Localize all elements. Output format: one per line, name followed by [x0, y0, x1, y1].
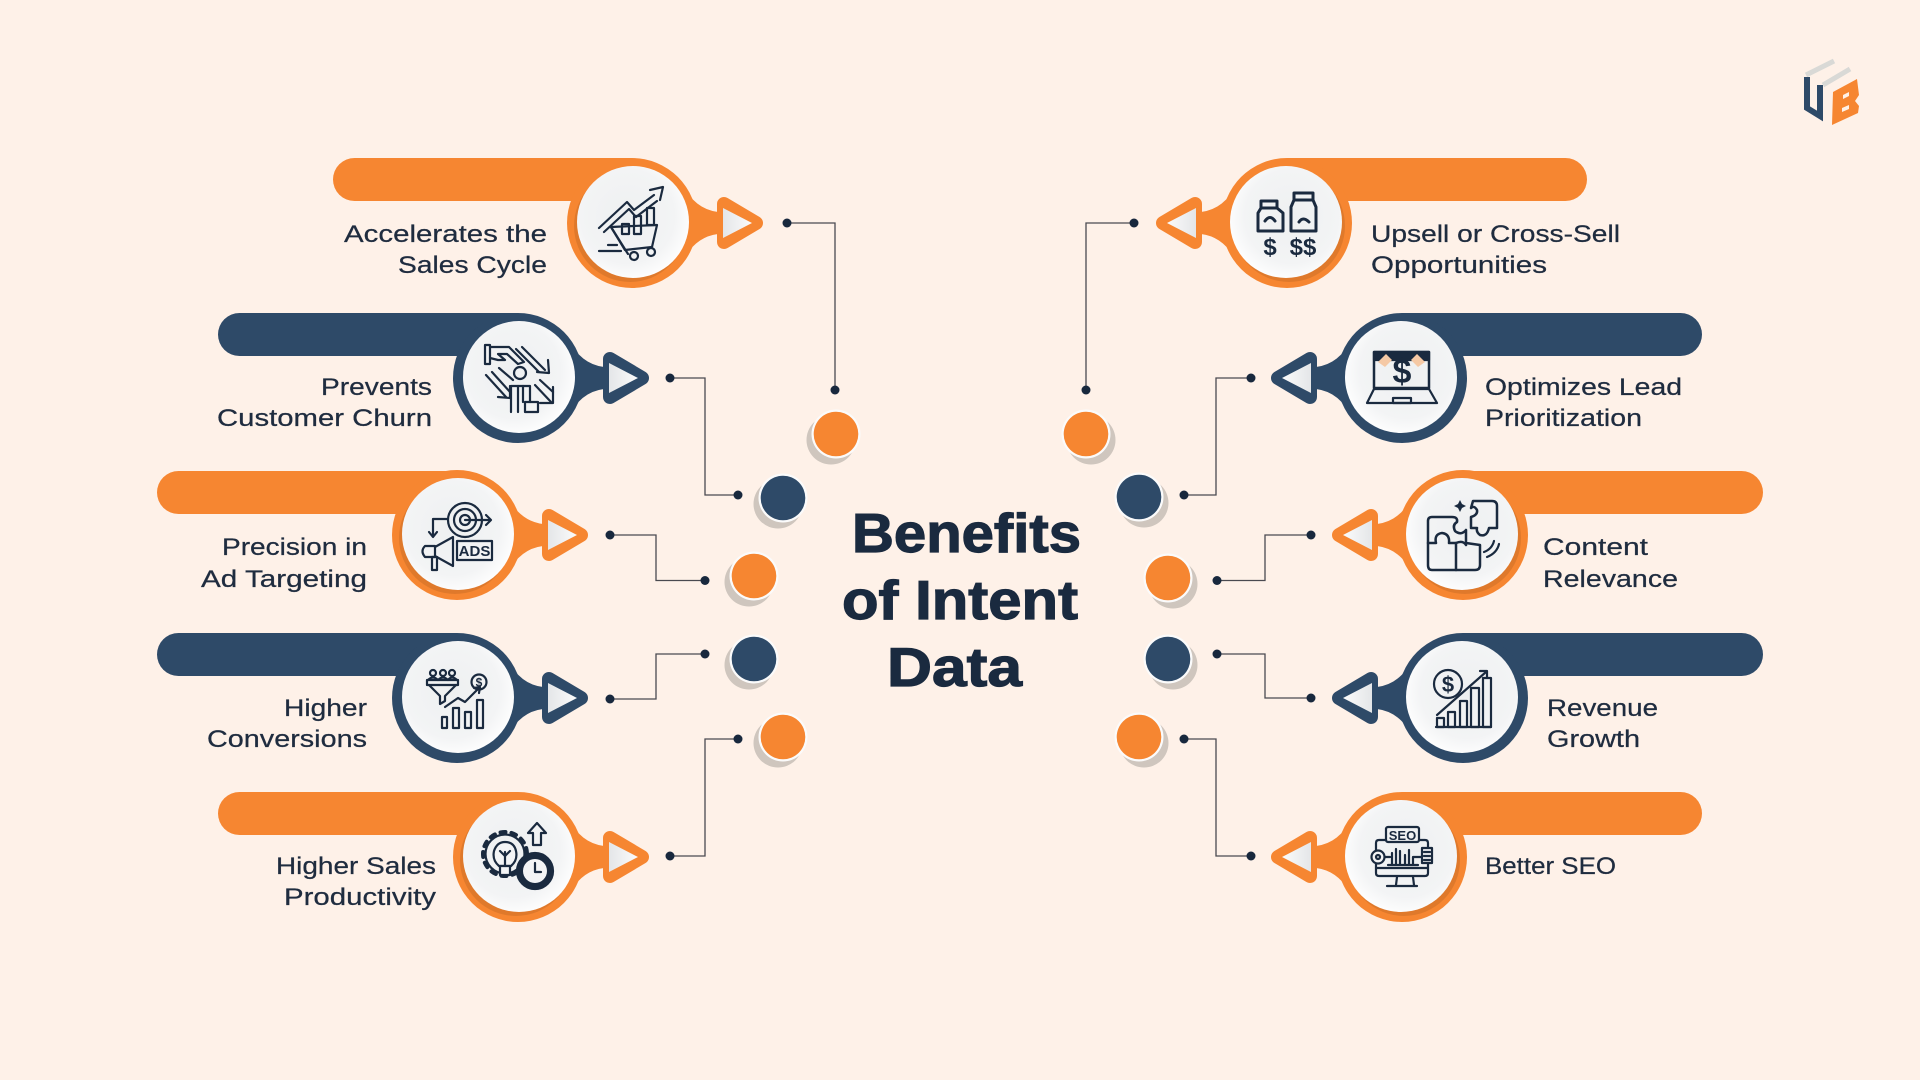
label: higher conversions — [207, 695, 367, 753]
icon: seo monitor — [1372, 827, 1432, 886]
icon: laptop with dollar — [1367, 352, 1437, 403]
label: higher sales productivity — [276, 853, 437, 911]
icon text: dollar: $ — [1442, 672, 1454, 697]
badge: upsell or cross-sell — [1163, 158, 1587, 288]
icon text: dollars: $$ — [1290, 234, 1317, 261]
node: left orange 1 — [806, 410, 860, 464]
badge: precision in ad targeting — [157, 470, 581, 600]
label: precision in ad targeting: Precision in — [222, 534, 367, 561]
icon text: ADS: ADS — [459, 543, 490, 560]
label: revenue growth — [1547, 695, 1658, 753]
node: right orange 1 — [1062, 410, 1116, 464]
icon: leaving customer with arrows — [485, 345, 553, 412]
badge: content relevance — [1339, 470, 1763, 600]
icon: coin and rising bars — [1434, 670, 1491, 727]
label: accelerates the sales cycle: Sales Cycle — [398, 252, 547, 279]
label: content relevance: Content — [1543, 534, 1648, 561]
icon text: dollar: $ — [476, 676, 483, 690]
label: higher sales productivity: Productivity — [284, 884, 437, 911]
connector: revenue growth — [1212, 650, 1316, 702]
label: higher conversions: Higher — [284, 695, 367, 722]
node: left orange 3 — [724, 552, 778, 606]
badge: accelerates the sales cycle — [333, 158, 756, 288]
badge: better seo — [1278, 792, 1702, 922]
title: Benefits — [852, 502, 1081, 564]
badge: optimizes lead prioritization — [1278, 313, 1702, 443]
icon text: dollars: $ — [1263, 234, 1277, 261]
label: upsell or cross-sell opportunities: Upsell or Cross-Sell — [1371, 221, 1620, 248]
icon: gear lightbulb with clock — [483, 823, 553, 889]
title: of Intent — [842, 569, 1078, 631]
label: content relevance — [1543, 534, 1678, 593]
icon: funnel with bar chart — [427, 670, 486, 728]
connector: content relevance — [1212, 530, 1316, 585]
label: upsell or cross-sell opportunities — [1371, 221, 1620, 279]
label: accelerates the sales cycle — [344, 221, 547, 279]
icon text: dollar: $ — [1393, 353, 1412, 391]
label: prevents customer churn: Prevents — [321, 374, 432, 401]
connector: conversions — [606, 650, 710, 704]
node: right navy 4 — [1144, 634, 1198, 690]
node: left navy 4 — [724, 634, 778, 690]
label: precision in ad targeting — [201, 534, 367, 593]
badge: prevents customer churn — [218, 313, 642, 443]
label: prevents customer churn — [217, 374, 432, 432]
label: accelerates the sales cycle: Accelerates the — [344, 221, 547, 248]
icon: jars with dollar signs — [1258, 193, 1316, 231]
label: content relevance: Relevance — [1543, 566, 1678, 593]
logo — [1806, 61, 1859, 125]
icon: shopping cart with rising chart — [599, 187, 663, 260]
badge: revenue growth — [1339, 633, 1763, 763]
node: left navy 2 — [754, 474, 808, 528]
label: prevents customer churn: Customer Churn — [217, 405, 432, 432]
connector: productivity — [666, 734, 742, 860]
badge: higher sales productivity — [218, 792, 642, 922]
title — [842, 502, 1081, 698]
badge: higher conversions — [157, 633, 581, 763]
title: Data — [887, 636, 1022, 698]
connector: lead prioritization — [1180, 374, 1256, 500]
connector: ad targeting — [606, 530, 710, 585]
label: revenue growth: Revenue — [1547, 695, 1658, 722]
label: higher conversions: Conversions — [207, 726, 367, 753]
node: right navy 2 — [1114, 472, 1168, 528]
node: right orange 3 — [1144, 554, 1198, 608]
label: revenue growth: Growth — [1547, 726, 1640, 753]
connector: churn — [666, 374, 742, 500]
label: upsell or cross-sell opportunities: Opportunities — [1371, 252, 1547, 279]
icon text: dollars — [1263, 234, 1317, 261]
label: better seo: Better SEO — [1485, 853, 1616, 880]
icon text: SEO: SEO — [1389, 828, 1416, 843]
connector: better seo — [1180, 734, 1256, 860]
label: optimizes lead prioritization: Optimizes Lead — [1485, 374, 1682, 401]
label: precision in ad targeting: Ad Targeting — [201, 566, 367, 593]
connector: accelerates — [782, 218, 840, 394]
icon: target and megaphone with ads sign — [422, 503, 492, 570]
icon: puzzle pieces — [1428, 500, 1499, 570]
label: optimizes lead prioritization: Prioritization — [1485, 405, 1642, 432]
node: left orange 5 — [754, 712, 808, 768]
node: right orange 5 — [1114, 712, 1168, 768]
connector: upsell — [1082, 218, 1138, 394]
label: optimizes lead prioritization — [1485, 374, 1682, 432]
label: higher sales productivity: Higher Sales — [276, 853, 436, 880]
